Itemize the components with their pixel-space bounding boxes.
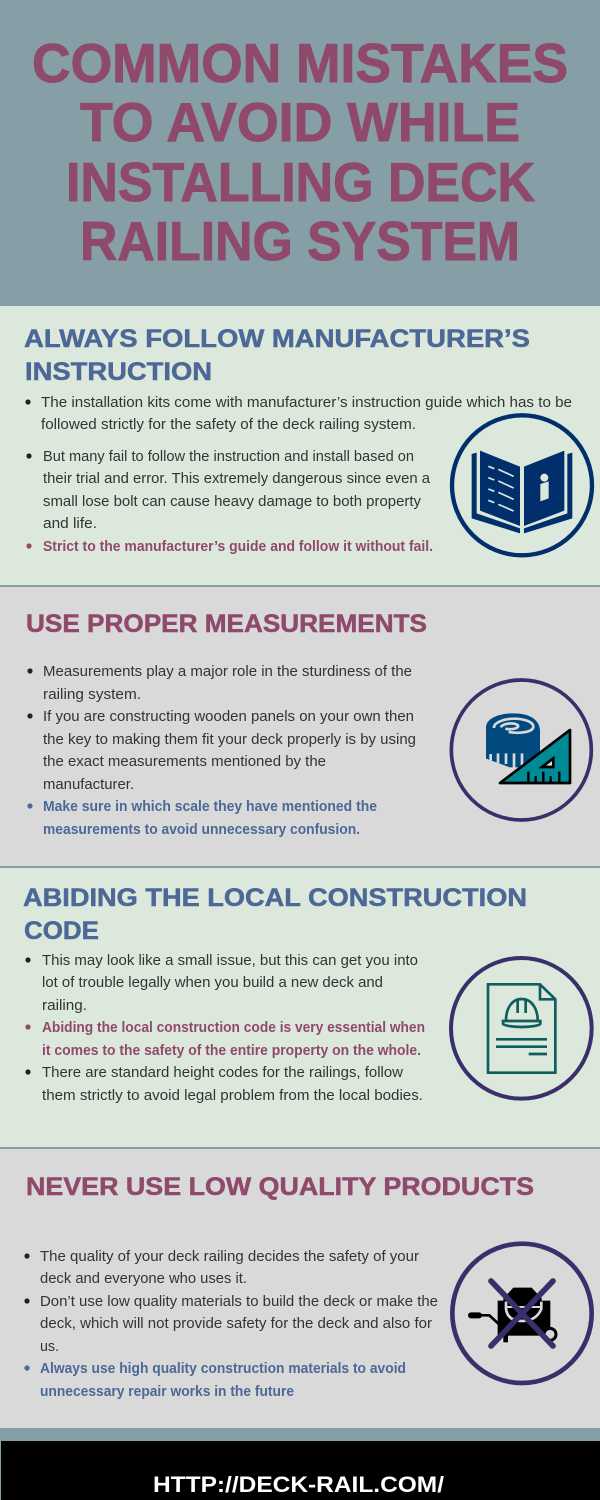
text block: measurement bullets: the key to making them fit your deck properly is by using	[43, 732, 416, 748]
panel: use proper measurements	[0, 587, 600, 866]
text block: measurement bullets: measurements to avoid unnecessary confusion.	[43, 822, 360, 838]
text block: measurement bullets: railing system.	[43, 687, 141, 703]
text block: manufacturer bullets: Strict to the manufacturer’s guide and follow it without fail.	[43, 539, 433, 555]
footer bar	[1, 1441, 600, 1500]
text block: construction bullets: lot of trouble legally when you build a new deck and	[42, 975, 383, 991]
text block: quality bullets	[24, 1249, 438, 1400]
text block: manufacturer bullets	[25, 395, 572, 555]
heading: construction code	[23, 884, 527, 945]
title: TO AVOID WHILE	[80, 91, 520, 153]
text block: manufacturer bullets: The installation kits come with manufacturer’s instruction guide which has to be	[41, 395, 572, 411]
text block: quality bullets: us.	[40, 1339, 59, 1355]
text block: quality bullets: deck, which will not provide safety for the deck and also for	[40, 1316, 432, 1332]
heading: always follow: INSTRUCTION	[25, 358, 212, 386]
panel: never use low quality products	[0, 1149, 600, 1428]
text block: measurement bullets: Make sure in which scale they have mentioned the	[43, 799, 377, 815]
icon: tape measure and set square	[451, 680, 591, 820]
heading: low quality: NEVER USE LOW QUALITY PRODUCTS	[26, 1173, 534, 1201]
title	[32, 32, 568, 272]
icon: crossed-out mixer	[452, 1244, 592, 1383]
text block: manufacturer bullets: their trial and error. This extremely dangerous since even a	[43, 471, 431, 487]
text block: manufacturer bullets: followed strictly for the safety of the deck railing system.	[41, 417, 416, 433]
text block: construction bullets: There are standard height codes for the railings, follow	[42, 1065, 404, 1081]
text block: manufacturer bullets: But many fail to follow the instruction and install based on	[43, 449, 414, 465]
text block: quality bullets: The quality of your deck railing decides the safety of your	[40, 1249, 419, 1265]
panel: abiding the local construction code	[0, 868, 600, 1147]
text block: quality bullets: Don’t use low quality materials to build the deck or make the	[40, 1294, 438, 1310]
heading: always follow	[24, 325, 530, 386]
text block: construction bullets: railing.	[42, 998, 87, 1014]
heading: always follow: ALWAYS FOLLOW MANUFACTURER’S	[24, 325, 530, 353]
text block: measurement bullets	[27, 664, 416, 838]
footer url: HTTP://DECK-RAIL.COM/	[153, 1472, 444, 1497]
text block: construction bullets: them strictly to avoid legal problem from the local bodies.	[42, 1088, 423, 1104]
title: INSTALLING DECK	[66, 151, 535, 213]
title: COMMON MISTAKES	[32, 32, 568, 94]
text block: measurement bullets: Measurements play a major role in the sturdiness of the	[43, 664, 412, 680]
text block: construction bullets: Abiding the local construction code is very essential when	[42, 1020, 425, 1036]
icon: instruction book	[452, 415, 592, 555]
icon: document with hard hat	[451, 958, 592, 1099]
text block: quality bullets: unnecessary repair works in the future	[40, 1384, 294, 1400]
text block: quality bullets: Always use high quality construction materials to avoid	[40, 1361, 406, 1377]
text block: manufacturer bullets: small lose bolt can cause heavy damage to both property	[43, 494, 422, 510]
panel: always follow manufacturer's instruction	[0, 306, 600, 585]
text block: measurement bullets: the exact measurements mentioned by the	[43, 754, 326, 770]
text block: measurement bullets: manufacturer.	[43, 777, 134, 793]
heading: construction code: CODE	[24, 917, 99, 945]
text block: quality bullets: deck and everyone who uses it.	[40, 1271, 247, 1287]
text block: construction bullets	[25, 953, 425, 1104]
heading: construction code: ABIDING THE LOCAL CONSTRUCTION	[23, 884, 527, 912]
text block: construction bullets: This may look like a small issue, but this can get you into	[42, 953, 418, 969]
heading: measurements: USE PROPER MEASUREMENTS	[26, 610, 427, 638]
text block: measurement bullets: If you are constructing wooden panels on your own then	[43, 709, 414, 725]
text block: manufacturer bullets: and life.	[43, 516, 97, 532]
text block: construction bullets: it comes to the safety of the entire property on the whole.	[42, 1043, 421, 1059]
title: RAILING SYSTEM	[80, 210, 520, 272]
